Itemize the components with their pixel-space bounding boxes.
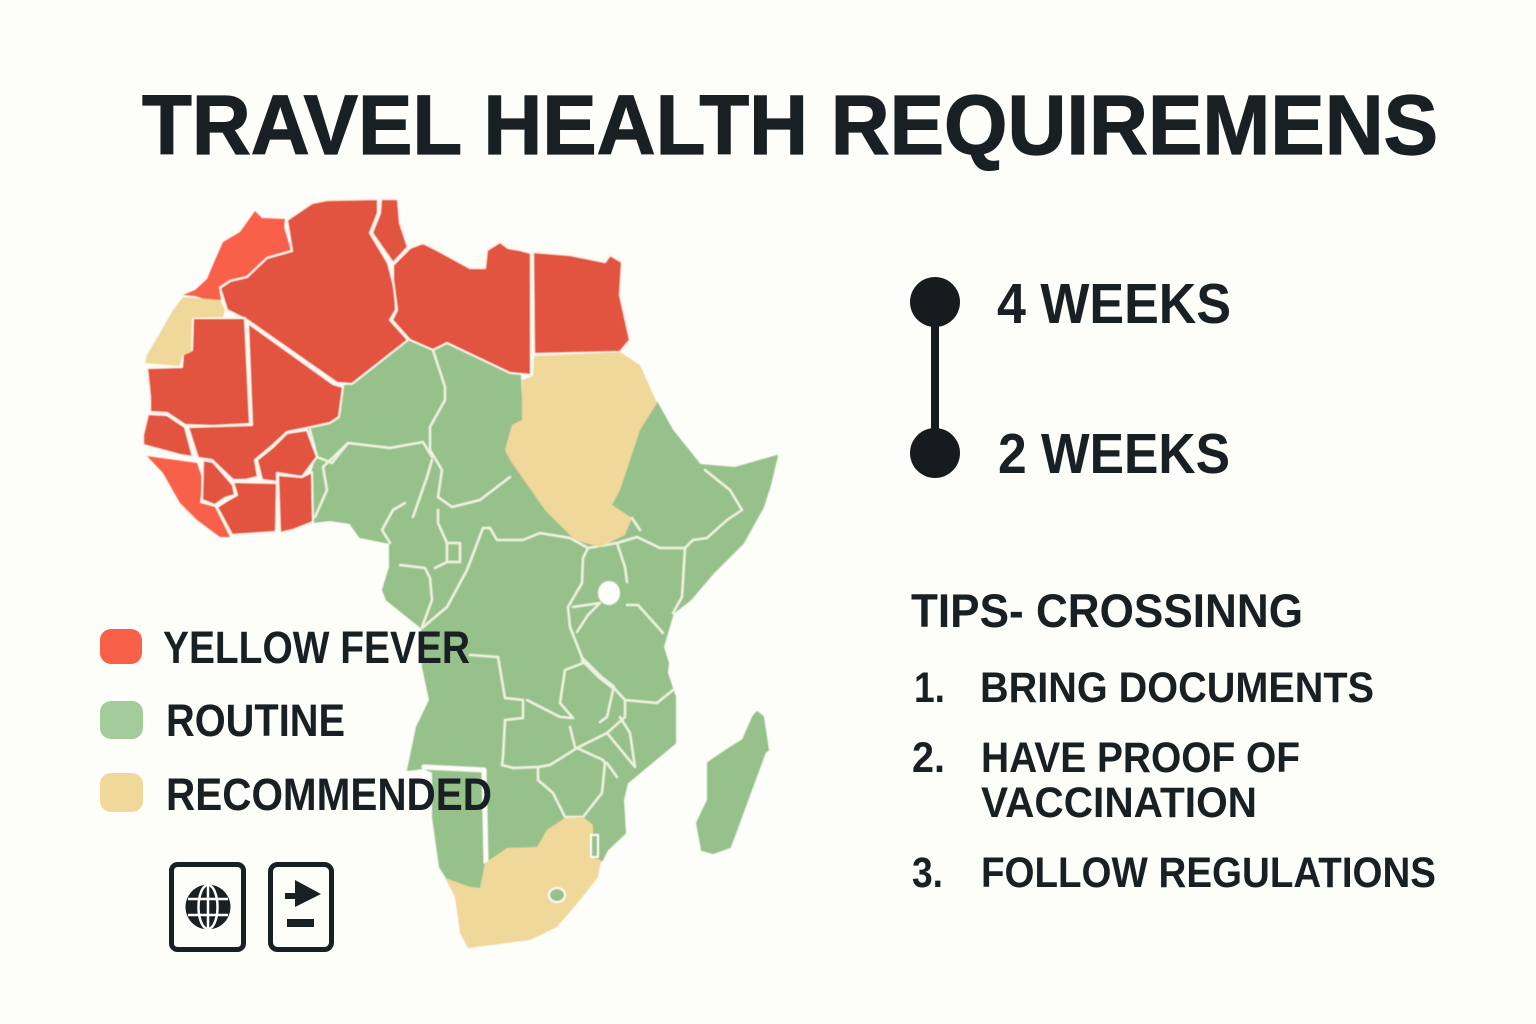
timeline connector [931,302,939,453]
tip 1: BRING DOCUMENTS [980,664,1374,712]
tips heading: TIPS- CROSSINNG [911,584,1303,637]
timeline label: 4 weeks: 4 WEEKS [997,272,1231,336]
country: Western Sahara [145,297,225,366]
map: Africa vaccination requirements [143,199,777,948]
legend label: recommended: RECOMMENDED [166,769,492,820]
tip 2: HAVE PROOF OF [981,734,1300,782]
tip 2: VACCINATION [981,779,1257,827]
tip 2: 2. [912,734,945,782]
legend swatch: yellow fever [100,629,142,664]
country: Morocco [183,211,291,300]
country: Libya [392,242,531,375]
icon: lake in East Africa [598,581,620,605]
country: Ghana Togo Benin [278,472,313,533]
region: routine countries (green) [307,341,777,900]
legend [100,622,492,820]
border: Namibia white outline [424,767,486,862]
icon: entry document with arrow [270,864,332,950]
country: Tunisia [372,199,408,263]
region: Madagascar [697,712,768,853]
timeline marker: 4 weeks [910,277,960,327]
tip 2 [912,734,1300,827]
country: Burkina Faso [257,430,317,482]
country: Ivory Coast [217,482,277,535]
country: Guinea interior [202,460,235,505]
region: yellow fever countries (red) [143,199,630,537]
country: Lesotho [549,888,565,902]
tip 3: FOLLOW REGULATIONS [981,849,1436,897]
tips panel [911,584,1436,897]
legend swatch: recommended [100,773,143,812]
legend swatch: routine [100,701,143,739]
timeline label: 2 weeks: 2 WEEKS [998,422,1230,486]
country: Egypt [533,252,630,354]
legend label: routine: ROUTINE [166,695,345,746]
country: Guinea coast [147,456,230,537]
icon: passport with globe [172,864,244,950]
country: Eswatini [591,835,598,857]
country: Mauritania [147,318,250,426]
tip 3: 3. [912,849,943,897]
country: Sudan [505,352,657,547]
timeline: weeks before travel [910,272,1231,486]
country: South Africa [445,817,601,948]
country: Senegal [143,414,193,457]
region: recommended countries (beige) [145,297,657,948]
timeline marker: 2 weeks [910,428,960,478]
tip 1: 1. [914,664,945,712]
legend label: yellow fever: YELLOW FEVER [163,622,470,673]
country: Mali [188,323,343,480]
title: TRAVEL HEALTH REQUIREMENS [142,78,1438,172]
country: Algeria [220,199,408,384]
